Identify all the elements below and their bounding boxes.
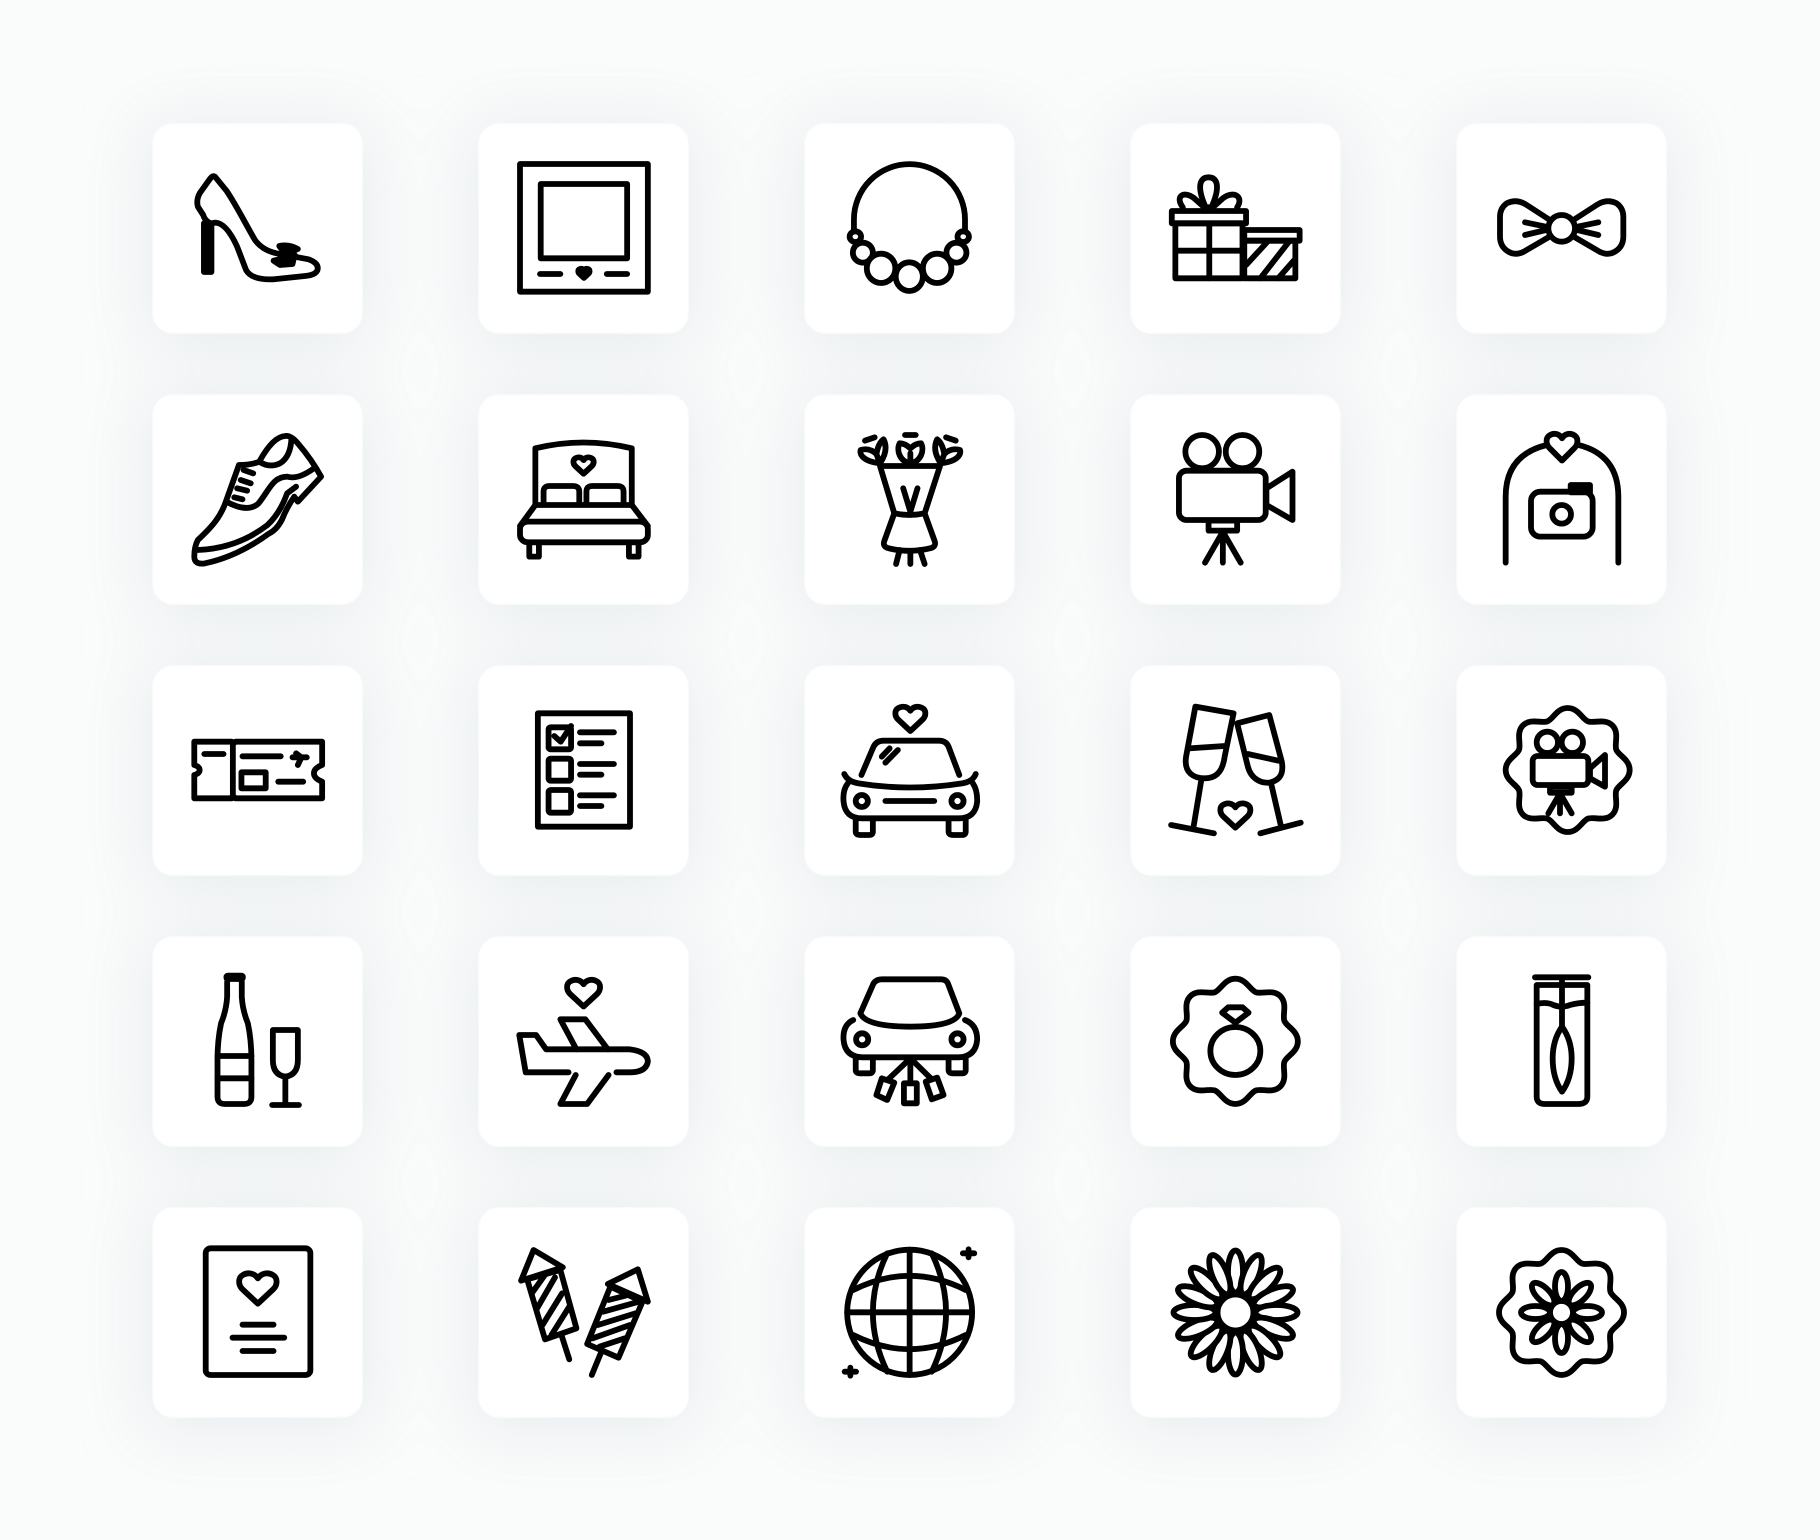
icon: toasting champagne glasses [1171,707,1301,833]
card: perfume vial [1457,937,1666,1146]
card: champagne toast [1131,666,1340,875]
card: video badge [1457,666,1666,875]
icon: airplane with heart [519,980,648,1104]
card: wedding car front [805,666,1014,875]
card: honeymoon plane [479,937,688,1146]
icon: firework rockets [521,1250,648,1375]
card: plane ticket [153,666,362,875]
card: fireworks [479,1208,688,1417]
card: bottle and glass [153,937,362,1146]
icon: car with trailing cans [843,979,977,1103]
card: ring badge [1131,937,1340,1146]
icon: daisy flower [1174,1250,1298,1374]
card: gift boxes [1131,124,1340,333]
card: high heel [153,124,362,333]
icon: movie camera on tripod [1179,435,1292,563]
icon: boarding pass ticket [194,742,322,798]
icon: wedding car with heart [843,707,977,835]
icon: photo frame with heart [520,164,648,292]
icon: wedding checklist [538,713,630,827]
card: just-married car [805,937,1014,1146]
icon: arch with heart and camera [1506,434,1618,563]
icon: wine bottle and flute [217,976,299,1105]
icon: flower in wavy badge [1499,1250,1624,1375]
card: bouquet [805,395,1014,604]
card: movie camera [1131,395,1340,604]
icon: high heel shoe [197,176,318,279]
icon: disco ball with sparkles [845,1249,974,1376]
icon: boutonniere box [1535,977,1588,1104]
card: invitation [153,1208,362,1417]
card: bow tie [1457,124,1666,333]
icon: double bed with heart [520,442,648,557]
icon: diamond ring in wavy badge [1173,979,1298,1104]
icon: groom's oxford shoe [194,436,321,564]
card: photo booth arch [1457,395,1666,604]
card: necklace [805,124,1014,333]
icon: bow tie [1500,201,1623,254]
card: checklist [479,666,688,875]
card: disco ball [805,1208,1014,1417]
card: double bed [479,395,688,604]
card: oxford shoe [153,395,362,604]
card: daisy [1131,1208,1340,1417]
card: flower badge [1457,1208,1666,1417]
icon: gift boxes [1172,177,1300,278]
icon: flower bouquet [860,435,960,564]
icon: movie camera in wavy badge [1506,708,1630,832]
card: polaroid frame [479,124,688,333]
icon: pearl necklace [850,164,969,291]
icon: invitation card with heart [206,1248,310,1375]
